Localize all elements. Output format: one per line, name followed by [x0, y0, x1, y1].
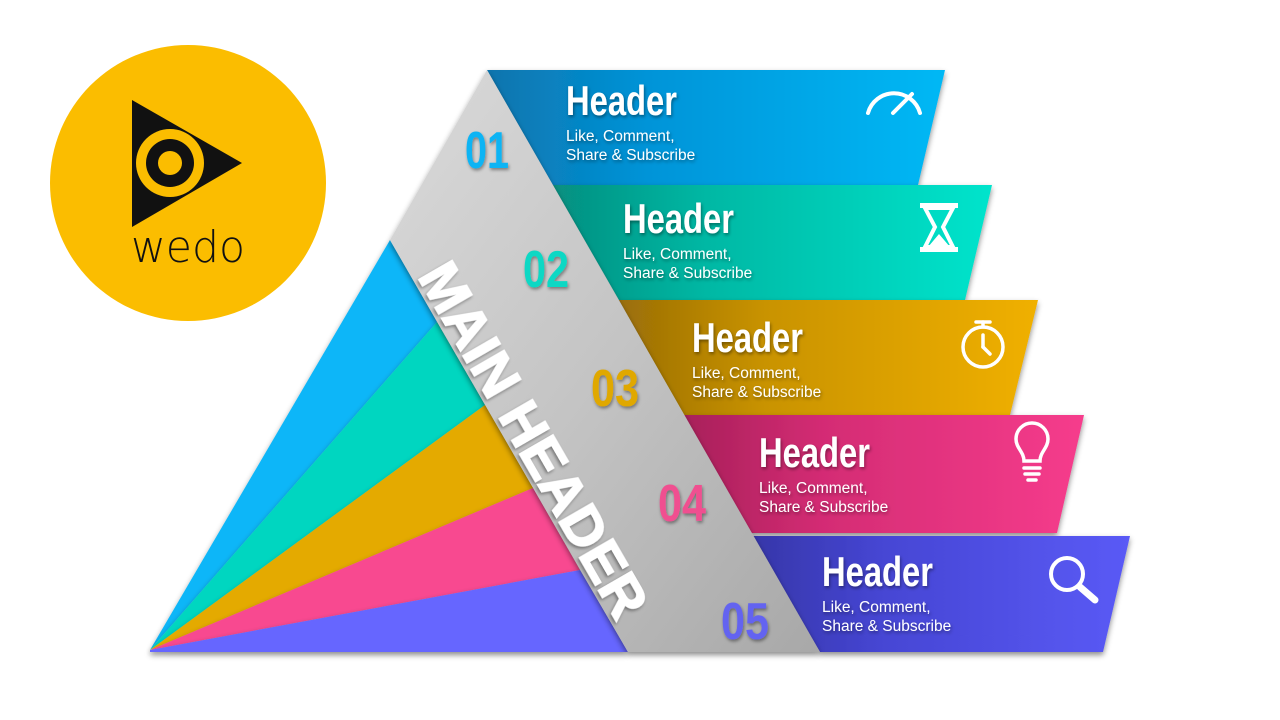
row 5 text: Like, Comment, [822, 599, 931, 616]
row 1 text: Like, Comment, [566, 128, 675, 145]
row 3 text: Share & Subscribe [692, 384, 821, 401]
row 3 text: Like, Comment, [692, 365, 801, 382]
row 2 text: Like, Comment, [623, 246, 732, 263]
row 3 text: Header [692, 314, 803, 361]
icon: magnifier [1051, 558, 1095, 600]
numbers: 02 [523, 241, 569, 299]
numbers: 03 [591, 360, 639, 418]
row 2 text [623, 195, 752, 282]
numbers: 05 [721, 593, 769, 651]
row 4 text: Share & Subscribe [759, 499, 888, 516]
main header: MAIN HEADER [407, 251, 661, 629]
fan slices [150, 240, 628, 652]
numbers: 01 [465, 122, 509, 180]
row 5 text: Share & Subscribe [822, 618, 951, 635]
logo: wedo [131, 222, 245, 273]
numbers [465, 122, 769, 651]
row 2 text: Share & Subscribe [623, 265, 752, 282]
row 5 text: Header [822, 548, 933, 595]
row 4 text [759, 429, 888, 516]
row 4 text: Like, Comment, [759, 480, 868, 497]
row 1 text: Header [566, 77, 677, 124]
logo [50, 45, 326, 321]
row 1 text: Share & Subscribe [566, 147, 695, 164]
row 3 text [692, 314, 821, 401]
icon: hourglass [920, 203, 958, 252]
numbers: 04 [658, 475, 706, 533]
row 1 text [566, 77, 695, 164]
row 2 text: Header [623, 195, 734, 242]
icon: speedometer [868, 93, 920, 113]
icon: stopwatch [963, 322, 1003, 367]
icon: lightbulb [1016, 423, 1048, 480]
bars [487, 70, 1130, 652]
gray band [390, 70, 820, 652]
row 4 text: Header [759, 429, 870, 476]
row 5 text [822, 548, 951, 635]
